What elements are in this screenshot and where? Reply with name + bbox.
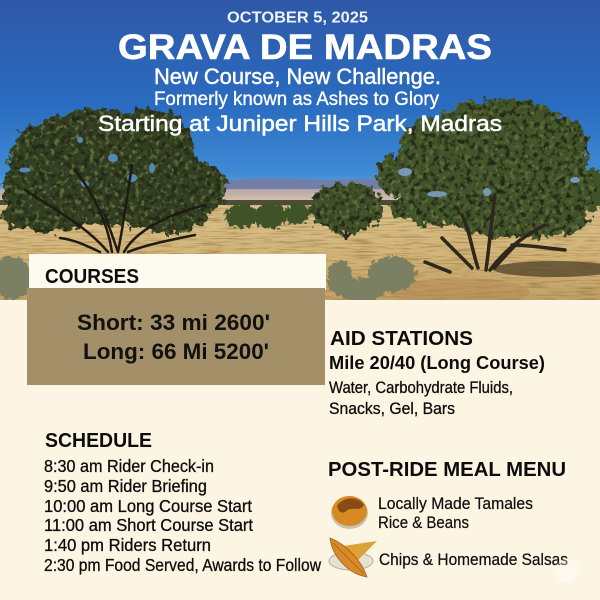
courses heading card: COURSES [45,266,139,288]
panel: courses [27,254,326,385]
panel: schedule: 11:00 am Short Course Start [44,515,253,535]
grassland [0,205,600,306]
panel: schedule: 1:40 pm Riders Return [44,535,211,555]
sky gaps [19,137,155,187]
canopy [377,99,596,238]
branches [25,165,205,252]
lower cream background [0,300,600,600]
tamales menu text [378,494,533,532]
tagline: New Course, New Challenge. [154,64,441,89]
panel: schedule: 9:50 am Rider Briefing [44,476,207,496]
icon: tamale [331,496,368,529]
former name: Formerly known as Ashes to Glory [154,89,439,110]
sky gaps [398,168,580,197]
left tree [1,108,228,252]
middle tree [309,183,383,240]
sagebrush [0,256,416,302]
courses heading card [29,254,326,290]
panel: aid stations: AID STATIONS [330,328,473,350]
panel: schedule [44,430,321,575]
panel: aid stations [329,328,545,418]
panel: schedule: 2:30 pm Food Served, Awards to Follow [44,555,321,575]
start location: Starting at Juniper Hills Park, Madras [98,111,502,136]
tamales menu text: Locally Made Tamales [378,494,533,513]
event title: GRAVA DE MADRAS [118,28,492,67]
panel: schedule: 8:30 am Rider Check-in [44,456,214,476]
distant shrubs [225,168,600,229]
menu heading: POST-RIDE MEAL MENU [328,459,566,481]
panel: aid stations: Water, Carbohydrate Fluids, [329,378,513,397]
course distances [27,288,325,385]
tamales menu text: Rice & Beans [378,513,469,532]
right tree [377,99,596,272]
branches [425,195,565,272]
distant mountains [0,178,600,206]
panel: post-ride meal menu [328,459,568,577]
panel: schedule: SCHEDULE [45,430,152,452]
sky [0,0,600,210]
header text [98,10,502,136]
landscape photo [0,0,600,306]
chips menu text: Chips & Homemade Salsas [379,550,568,569]
panel: aid stations: Snacks, Gel, Bars [329,399,455,418]
panel: schedule: 10:00 am Long Course Start [44,496,252,516]
panel: aid stations: Mile 20/40 (Long Course) [329,353,545,373]
event date: OCTOBER 5, 2025 [227,10,368,26]
watermark [555,559,579,583]
course distances: Long: 66 Mi 5200' [83,339,269,364]
course distances: Short: 33 mi 2600' [77,310,270,335]
canopy [1,108,228,233]
icon: chips [329,538,377,577]
